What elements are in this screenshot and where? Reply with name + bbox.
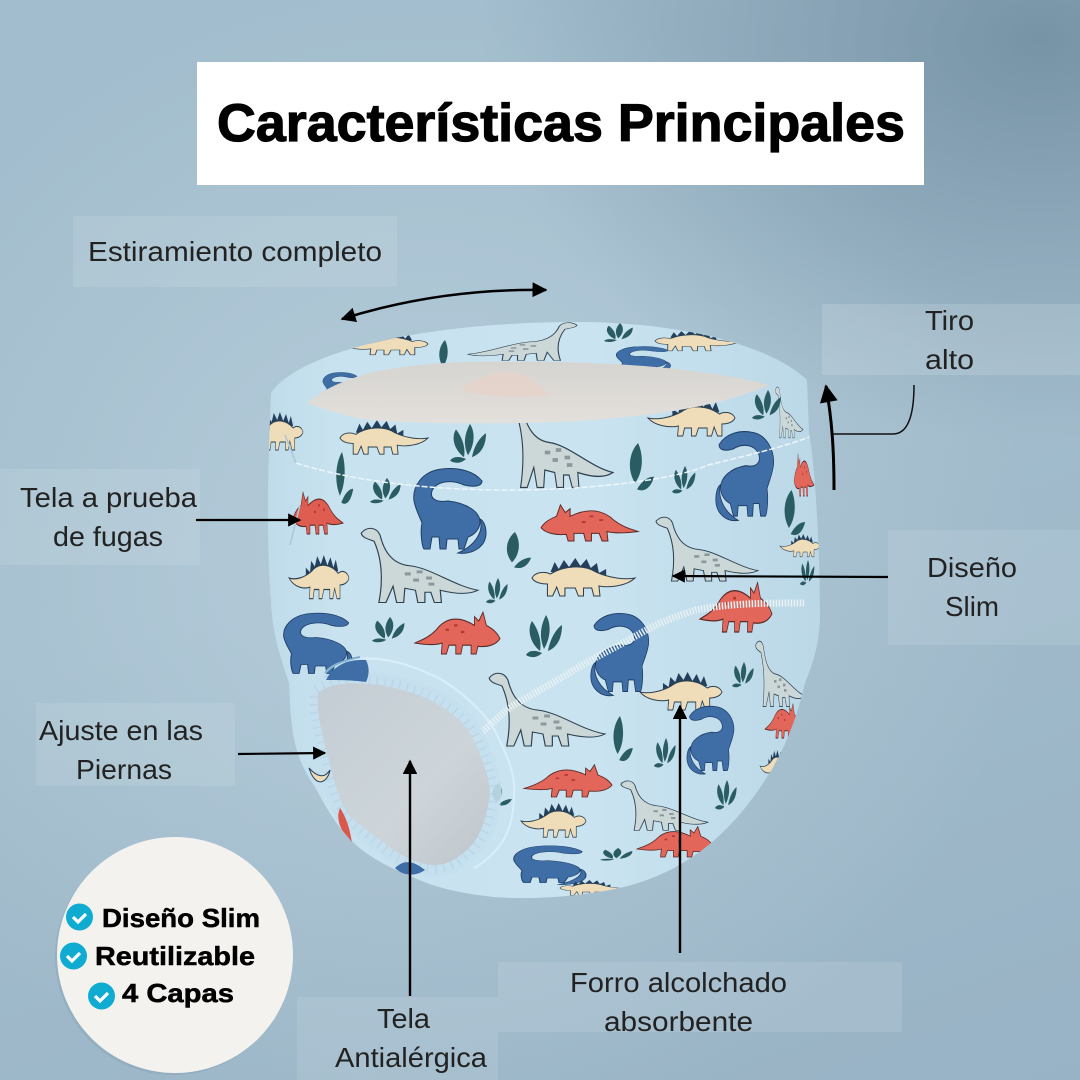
label: Estiramiento completo bbox=[73, 216, 397, 287]
label: Tela Antialérgica: Antialérgica bbox=[335, 1042, 487, 1073]
arrow: hypoallergenic fabric bbox=[409, 761, 411, 996]
product: dinosaur print training pants bbox=[248, 322, 820, 898]
arrow: stretch bbox=[342, 290, 546, 319]
arrow: leak-proof fabric bbox=[196, 519, 300, 521]
label: Ajuste en las Piernas: Ajuste en las bbox=[39, 715, 203, 746]
badge: benefits circle bbox=[55, 837, 293, 1075]
arrow: absorbent lining bbox=[679, 706, 681, 953]
dinosaur fragments on elastic bbox=[309, 660, 425, 875]
label: Tela a prueba de fugas: de fugas bbox=[53, 521, 163, 552]
overlock seam bbox=[474, 603, 805, 740]
label: Diseño Slim: Slim bbox=[945, 591, 999, 622]
waist seam bbox=[296, 437, 809, 490]
label: Tela a prueba de fugas: Tela a prueba bbox=[20, 482, 197, 513]
benefit: 4 Capas bbox=[88, 978, 234, 1010]
label: Diseño Slim bbox=[888, 530, 1080, 645]
label: Tiro alto: Tiro bbox=[925, 305, 974, 336]
label: Forro alcolchado absorbente: absorbente bbox=[604, 1006, 753, 1037]
leg elastic bbox=[318, 683, 490, 865]
blue highlight arc bbox=[325, 658, 514, 868]
label: Estiramiento completo: Estiramiento completo bbox=[88, 236, 382, 267]
label: Tiro alto: alto bbox=[925, 344, 974, 375]
inner mesh lining bbox=[307, 362, 769, 423]
title bbox=[197, 62, 924, 185]
label: Ajuste en las Piernas bbox=[36, 703, 235, 786]
arrow: leg fit bbox=[238, 753, 325, 754]
label: Ajuste en las Piernas: Piernas bbox=[76, 754, 172, 785]
dinosaur pattern bbox=[248, 323, 820, 895]
label: Tela Antialérgica: Tela bbox=[377, 1003, 430, 1034]
label: Forro alcolchado absorbente: Forro alcolchado bbox=[570, 967, 787, 998]
label: Tiro alto bbox=[822, 304, 1080, 375]
title: Características Principales bbox=[217, 94, 905, 153]
label: Forro alcolchado absorbente bbox=[498, 962, 902, 1037]
benefit: Reutilizable: Reutilizable bbox=[95, 941, 255, 971]
benefit: 4 Capas: 4 Capas bbox=[122, 978, 234, 1008]
arrow: slim design bbox=[673, 576, 888, 577]
label: Diseño Slim: Diseño bbox=[927, 552, 1017, 583]
arrow: high rise bbox=[826, 385, 914, 490]
benefit: Diseño Slim: Diseño Slim bbox=[102, 903, 260, 933]
fabric body bbox=[268, 322, 820, 898]
label: Tela a prueba de fugas bbox=[0, 469, 200, 565]
leg opening bbox=[318, 683, 490, 865]
label: Tela Antialérgica bbox=[297, 997, 498, 1080]
